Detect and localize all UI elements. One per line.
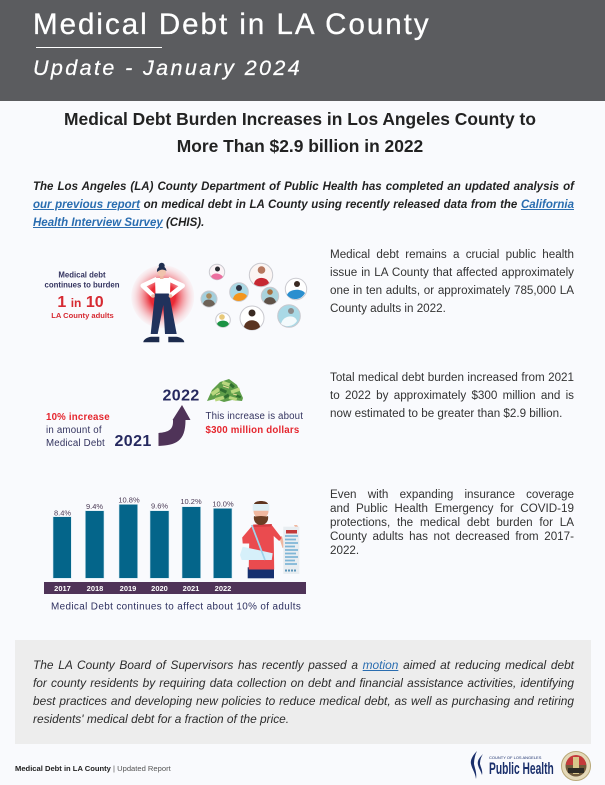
paragraph: insurance coverage: protections, the medical debt burden for LA — [330, 516, 574, 529]
annotation: 10% increase — [46, 412, 110, 449]
title: Medical Debt in LA County — [33, 8, 431, 41]
year axis band: 2020 — [151, 584, 168, 593]
panel text: residents' medical debt for a fraction of the price. — [33, 712, 289, 726]
paragraph: one in ten adults: one in ten adults, or approximately 785,000 LA — [330, 284, 574, 297]
paragraph: one in ten adults: issue in LA County that affected approximately — [330, 266, 574, 279]
bar value labels: 10.8% — [118, 496, 140, 504]
bar value labels — [54, 496, 234, 518]
panel text: The LA County Board of Supervisors has recently passed a motion aimed at reducing medical debt — [33, 658, 574, 672]
panel: board of supervisors motion — [15, 640, 591, 744]
year axis band: 2022 — [215, 584, 231, 593]
paragraph: total burden: to 2022 by approximately $300 million and is — [330, 389, 574, 402]
bar value labels: 8.4% — [54, 508, 71, 518]
main heading: More Than $2.9 billion in 2022 — [177, 136, 423, 156]
arrow: upward — [158, 405, 190, 446]
paragraph: insurance coverage: County adults has not decreased from 2017- — [330, 530, 574, 543]
paragraph: insurance coverage — [330, 488, 574, 557]
icon: pile of money — [207, 379, 243, 402]
intro paragraph: The Los Angeles (LA) County Department of Public Health has completed an updated analysis of — [33, 181, 574, 193]
logo: county of Los Angeles Public Health: COUNTY OF LOS ANGELES — [489, 755, 541, 760]
callout text: 1 in 10 — [57, 294, 104, 311]
callout text: Medical debt — [58, 270, 106, 280]
logo: county seal — [561, 751, 591, 781]
paragraph: insurance coverage: and Public Health Emergency for COVID-19 — [330, 502, 574, 515]
year axis band: 2021 — [183, 584, 199, 593]
chart caption: Medical Debt continues to affect about 10% of adults — [51, 602, 301, 612]
year axis band — [44, 582, 306, 594]
label: 2022: 2022 — [162, 388, 200, 404]
header banner — [0, 0, 605, 101]
footer text: Medical Debt in LA County | Updated Report — [15, 764, 171, 773]
main heading: Medical Debt Burden Increases in Los Angeles County to — [64, 109, 536, 129]
panel text — [33, 658, 574, 726]
paragraph: one in ten adults — [330, 248, 574, 315]
logo: county of Los Angeles Public Health: Public Health — [489, 760, 554, 778]
intro paragraph — [33, 181, 575, 229]
subtitle: Update - January 2024 — [33, 56, 302, 80]
paragraph: insurance coverage: Even with expanding insurance coverage — [330, 488, 574, 501]
icon: injured man holding bill — [240, 501, 299, 578]
annotation: 300 million dollars — [206, 411, 303, 436]
callout text: continues to burden — [45, 280, 120, 290]
intro paragraph: our previous report on medical debt in LA County using recently released data from the California — [33, 199, 574, 211]
annotation: 10% increase: 10% increase — [46, 412, 110, 423]
paragraph: insurance coverage: 2022. — [330, 544, 359, 557]
intro paragraph: Health Interview Survey (CHIS). — [33, 217, 204, 229]
year axis band: 2018 — [87, 584, 103, 593]
figure: 1 in 10 adults — [44, 262, 308, 342]
paragraph: total burden: Total medical debt burden increased from 2021 — [330, 371, 574, 384]
bar value labels: 10.0% — [212, 500, 234, 508]
annotation: 10% increase: Medical Debt — [46, 438, 105, 449]
paragraph: one in ten adults: County adults in 2022. — [330, 302, 446, 315]
year axis band: 2017 — [54, 584, 71, 593]
paragraph: total burden — [330, 371, 574, 420]
panel text: for county residents by requiring data collection on debt and financial assistance activities, identifying — [33, 676, 574, 690]
paragraph: one in ten adults: Medical debt remains a crucial public health — [330, 248, 574, 261]
main heading — [64, 109, 536, 156]
bars — [53, 504, 232, 578]
bar value labels: 9.6% — [151, 502, 168, 510]
paragraph: total burden: now estimated to be greater than $2.9 billion. — [330, 407, 562, 420]
callout text — [45, 270, 120, 320]
icon: standing woman — [131, 263, 194, 342]
annotation: 300 million dollars: $300 million dollars — [206, 425, 299, 436]
callout text: LA County adults — [51, 311, 114, 320]
bar chart: percent of adults with medical debt — [44, 496, 306, 612]
figure: 10% increase 2021 to 2022 — [46, 379, 303, 450]
logo: county of Los Angeles Public Health — [470, 751, 554, 779]
annotation: 300 million dollars: This increase is about — [206, 411, 303, 422]
icons: people portraits — [201, 263, 307, 330]
bar value labels: 10.2% — [180, 497, 202, 506]
annotation: 10% increase: in amount of — [46, 425, 102, 436]
label: 2021: 2021 — [114, 433, 152, 450]
panel text: best practices and developing new policies to reduce medical debt, as well as purchasing and retiring — [33, 694, 574, 708]
year axis band: 2019 — [120, 584, 136, 593]
bar value labels: 9.4% — [86, 502, 103, 511]
